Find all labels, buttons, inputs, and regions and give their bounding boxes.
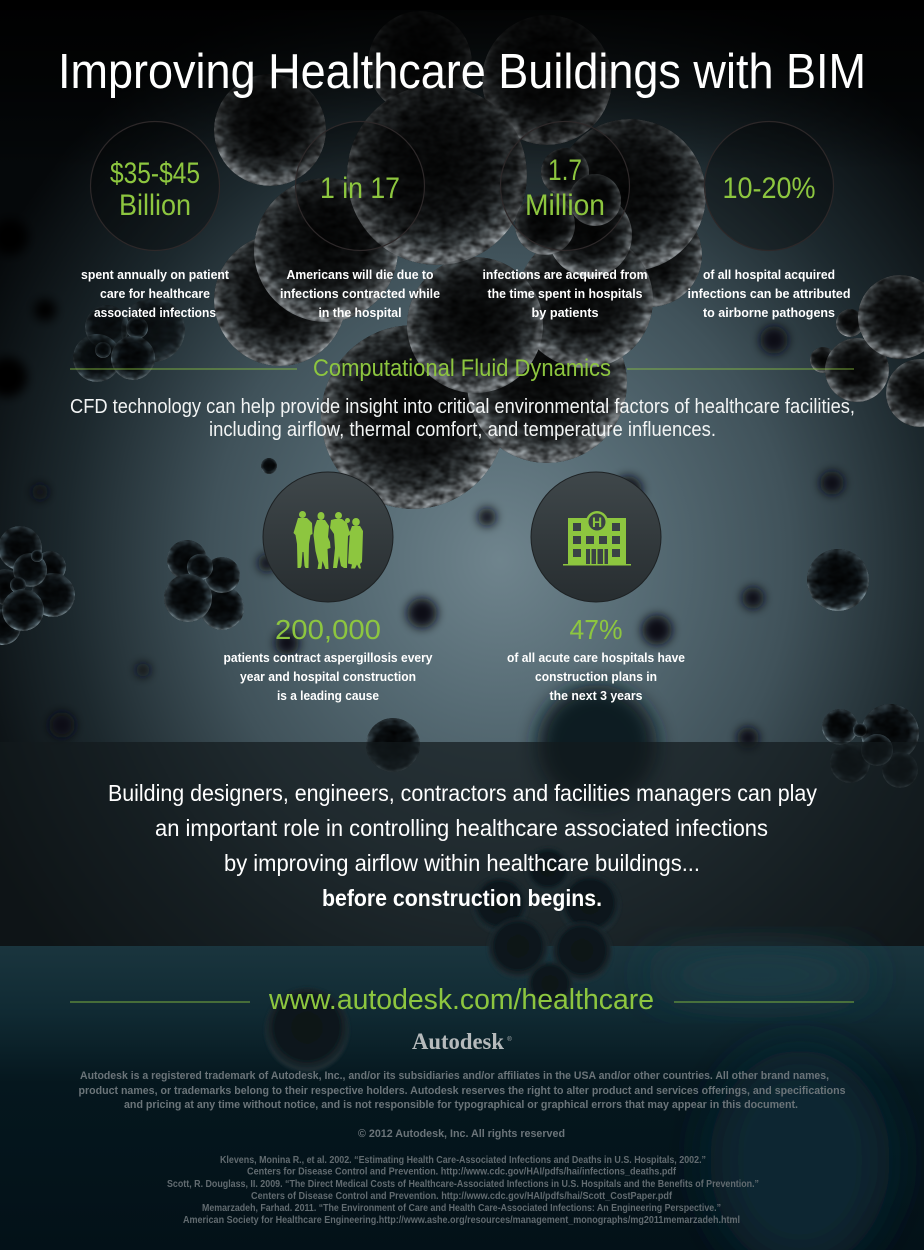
stat: 200,000 patients: year and hospital construction	[240, 669, 416, 684]
stat: 47% hospitals: construction plans in	[535, 669, 657, 684]
footer background	[0, 918, 924, 1250]
references	[167, 1155, 759, 1226]
legal text: and pricing at any time without notice, and is not responsible for typographical or graphical errors that may appear in this document.	[124, 1099, 798, 1111]
references: Centers of Disease Control and Prevention. http://www.cdc.gov/HAI/pdfs/hai/Scott_CostPaper.pdf	[251, 1191, 673, 1202]
legal text: Autodesk is a registered trademark of Autodesk, Inc., and/or its subsidiaries and/or affiliates in the USA and/or other countries. All other brand names,	[80, 1070, 829, 1082]
references: Klevens, Monina R., et al. 2002. “Estimating Health Care-Associated Infections and Deaths in U.S. Hospitals, 2002.”	[220, 1155, 706, 1166]
stat: 200,000 patients: 200,000	[275, 614, 381, 645]
message text: an important role in controlling healthcare associated infections	[155, 815, 768, 841]
legal text	[78, 1070, 846, 1111]
background: side cell clusters	[0, 275, 924, 788]
message band background	[0, 742, 924, 946]
stat: 1.7 Million: 1.7	[548, 154, 582, 187]
stat: 1.7 Million: by patients	[532, 305, 598, 320]
stat: $35-$45 Billion: spent annually on patient	[81, 267, 230, 282]
heading: Computational Fluid Dynamics: Computational Fluid Dynamics	[313, 355, 611, 382]
stat: $35-$45 Billion	[81, 122, 230, 320]
icon: people	[263, 472, 393, 602]
background: blurred spores	[0, 219, 844, 749]
CFD description: CFD technology can help provide insight into critical environmental factors of healthcare facilities,	[70, 396, 855, 418]
stat: 200,000 patients: is a leading cause	[277, 688, 379, 703]
title: Improving Healthcare Buildings with BIM	[58, 45, 866, 99]
message text: before construction begins.	[322, 885, 602, 911]
CFD description	[70, 396, 855, 441]
stat: 200,000 patients	[224, 614, 433, 703]
references: American Society for Healthcare Engineering.http://www.ashe.org/resources/management_monographs/mg2011memarzadeh.html	[183, 1215, 740, 1226]
icon: hospital building	[531, 472, 661, 602]
stat: 1.7 Million: infections are acquired from	[482, 267, 648, 282]
stat: 1.7 Million: the time spent in hospitals	[488, 286, 642, 301]
references: Centers for Disease Control and Prevention. http://www.cdc.gov/HAI/pdfs/hai/infections_deaths.pdf	[247, 1166, 677, 1178]
stat: 10-20%	[688, 122, 851, 320]
stat: $35-$45 Billion: Billion	[119, 189, 191, 222]
stat: $35-$45 Billion: care for healthcare	[100, 286, 210, 301]
icon: hospital building: H	[592, 514, 602, 530]
Autodesk logo: Autodesk	[412, 1029, 504, 1054]
stat: 1 in 17: in the hospital	[318, 305, 402, 320]
stat: 1 in 17: Americans will die due to	[286, 267, 434, 282]
stat: 47% hospitals: the next 3 years	[550, 688, 642, 703]
stat: 1 in 17	[280, 122, 440, 320]
top dark overlay	[0, 0, 924, 170]
website link: www.autodesk.com/healthcare	[268, 984, 654, 1016]
Autodesk logo: ®	[507, 1036, 512, 1043]
stat: 47% hospitals: 47%	[570, 614, 622, 645]
message text: by improving airflow within healthcare buildings...	[224, 850, 700, 876]
CFD description: including airflow, thermal comfort, and temperature influences.	[209, 419, 716, 441]
stat: 47% hospitals	[507, 614, 685, 703]
stat: 1.7 Million: Million	[525, 189, 605, 222]
background: main cell cluster	[214, 11, 706, 509]
stat: 200,000 patients: patients contract aspergillosis every	[224, 650, 433, 665]
stat: 1 in 17: infections contracted while	[280, 286, 440, 301]
stat: 10-20%: infections can be attributed	[688, 286, 851, 301]
stat: 10-20%: 10-20%	[722, 172, 816, 205]
legal text: product names, or trademarks belong to their respective holders. Autodesk reserves the right to alter product and services offerings, and specifications	[78, 1085, 846, 1097]
stat: 10-20%: of all hospital acquired	[703, 267, 835, 282]
copyright: © 2012 Autodesk, Inc. All rights reserved	[358, 1128, 565, 1140]
stat: 1.7 Million	[482, 122, 648, 320]
stat: $35-$45 Billion: associated infections	[94, 305, 216, 320]
message text: Building designers, engineers, contractors and facilities managers can play	[108, 780, 817, 806]
message text	[108, 780, 817, 911]
stat: $35-$45 Billion: $35-$45	[110, 157, 200, 190]
references: Memarzadeh, Farhad. 2011. “The Environment of Care and Health Care-Associated Infections: An Engineering Perspective.”	[202, 1203, 721, 1214]
stat: 47% hospitals: of all acute care hospitals have	[507, 650, 685, 665]
stat: 1 in 17: 1 in 17	[320, 172, 400, 205]
stat: 10-20%: to airborne pathogens	[703, 305, 835, 320]
background: large blurred ball	[537, 685, 657, 805]
references: Scott, R. Douglass, II. 2009. “The Direct Medical Costs of Healthcare-Associated Infections in U.S. Hospitals and the Benefits of Prevention.”	[167, 1179, 759, 1190]
